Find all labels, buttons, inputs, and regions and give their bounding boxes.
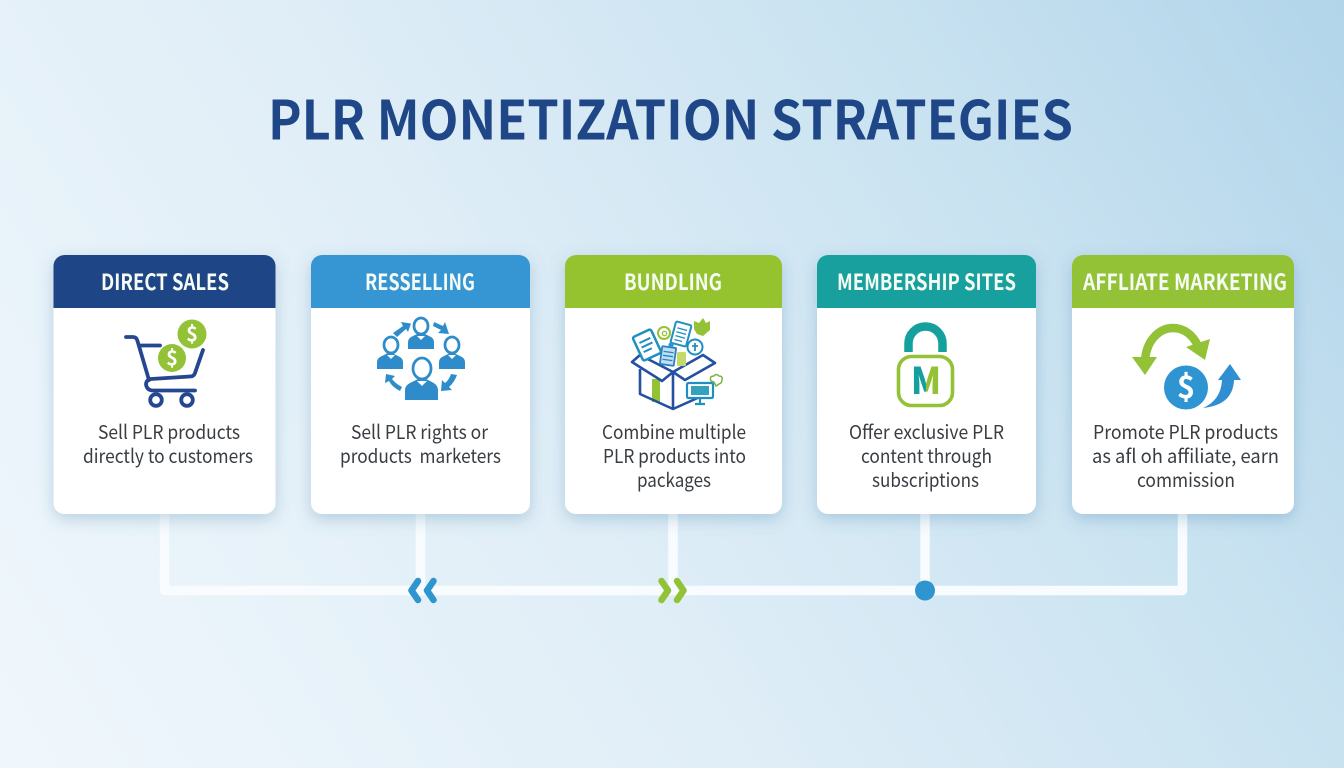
text: direct sales description: Sell PLR products (98, 418, 240, 445)
panel: bundling: BUNDLING (624, 265, 722, 297)
text: reselling description: products marketers (340, 442, 501, 469)
timeline node dot (915, 580, 935, 600)
text: membership description (849, 418, 1004, 493)
panel: affiliate marketing (1072, 255, 1294, 514)
panel: bundling (565, 255, 782, 514)
icon: green double chevron (662, 581, 684, 600)
text: membership description: content through (861, 442, 992, 469)
panel: affiliate marketing: AFFLIATE MARKETING (1082, 265, 1287, 297)
panel: reselling (311, 255, 530, 514)
panel: membership sites: MEMBERSHIP SITES (837, 265, 1016, 297)
panel: reselling: RESSELLING (365, 265, 475, 297)
icon: open box with content (632, 318, 722, 409)
text: affiliate description: Promote PLR products (1093, 418, 1278, 445)
text: reselling description (340, 418, 501, 469)
text: bundling description: packages (637, 466, 711, 493)
connector timeline (164, 510, 1182, 600)
icon: affiliate arrows and coin (1132, 328, 1241, 410)
text: bundling description (602, 418, 746, 493)
text: direct sales description: directly to customers (83, 442, 253, 469)
icon: padlock with M: M (911, 351, 941, 405)
icon: padlock with M (898, 326, 952, 406)
icon: shopping cart with coins (126, 318, 206, 406)
text: affiliate description: as afl oh affiliate, earn (1092, 442, 1279, 469)
text: bundling description: Combine multiple (602, 418, 746, 445)
panel: direct sales: DIRECT SALES (101, 265, 229, 297)
icon: people in a cycle (377, 318, 465, 400)
icon: affiliate arrows and coin: $ (1177, 362, 1195, 407)
text: direct sales description (83, 418, 253, 469)
text: reselling description: Sell PLR rights or (351, 418, 489, 445)
text: membership description: Offer exclusive PLR (849, 418, 1004, 445)
icon: blue double chevron (412, 581, 434, 600)
text: membership description: subscriptions (872, 466, 979, 493)
title: PLR MONETIZATION STRATEGIES (268, 76, 1073, 156)
icon: shopping cart with coins: $ (186, 318, 198, 347)
text: affiliate description: commission (1137, 466, 1235, 493)
text: affiliate description (1092, 418, 1279, 493)
panel: direct sales (54, 255, 276, 514)
panel: membership sites (817, 255, 1036, 514)
icon: shopping cart with coins: $ (166, 342, 178, 371)
text: bundling description: PLR products into (603, 442, 746, 469)
